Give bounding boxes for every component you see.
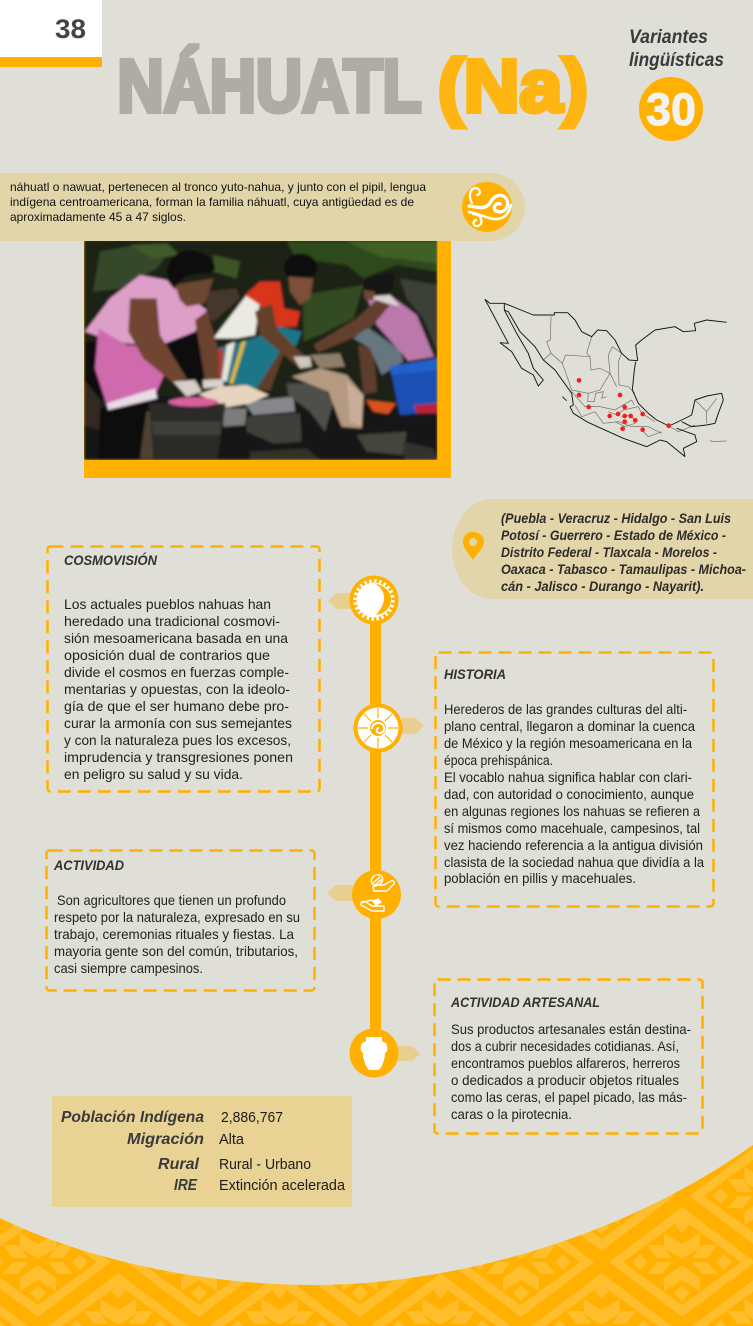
intro pill with text: aproximadamente 45 a 47 siglos. xyxy=(10,210,186,224)
footer textile pattern band xyxy=(0,1145,753,1326)
panel: historia: población en pillis y macehuales. xyxy=(444,870,636,886)
intro pill with text: indígena centroamericana, forman la familia náhuatl, cuya antigüedad es de xyxy=(10,195,414,209)
timeline spine xyxy=(370,600,381,1053)
panel: historia: HISTORIA xyxy=(444,666,506,682)
panel: historia: vez haciendo referencia a la antigua división xyxy=(444,837,703,853)
panel: actividad artesanal: encontramos pueblos alfareros, herreros xyxy=(451,1055,680,1071)
bucket xyxy=(149,403,226,459)
panel: historia xyxy=(436,652,714,906)
title: NÁHUATL xyxy=(118,44,422,128)
icon: clay jar xyxy=(350,1028,398,1078)
intro pill with text: náhuatl o nawuat, pertenecen al tronco yuto-nahua, y junto con el pipil, lengua xyxy=(10,180,426,194)
panel: cosmovisión: mentarias y opuestas, con la ideolo- xyxy=(64,681,290,697)
panel: actividad artesanal: como las ceras, el papel picado, las más- xyxy=(451,1089,687,1105)
panel: population stats: Rural - Urbano xyxy=(219,1156,311,1173)
states pill: Distrito Federal - Tlaxcala - Morelos - xyxy=(501,544,717,560)
state borders xyxy=(543,317,727,442)
photo with yellow frame xyxy=(84,239,451,478)
panel: cosmovisión: y con la naturaleza pues los excesos, xyxy=(64,732,291,748)
panel: cosmovisión: COSMOVISIÓN xyxy=(64,551,158,568)
panel: cosmovisión: curar la armonía con sus semejantes xyxy=(64,715,292,731)
panel: cosmovisión xyxy=(48,546,320,792)
variantes lingüísticas counter: lingüísticas xyxy=(629,50,724,71)
panel: cosmovisión: gía de que el ser humano debe pro- xyxy=(64,698,289,714)
panel: historia: El vocablo nahua significa hablar con clari- xyxy=(444,769,692,785)
panel: cosmovisión: Los actuales pueblos nahuas han xyxy=(64,596,271,612)
dough xyxy=(198,385,269,407)
timeline xyxy=(327,576,424,1078)
panel: actividad artesanal: ACTIVIDAD ARTESANAL xyxy=(450,994,600,1010)
panel: historia: sí mismos como macehuale, campesinos, tal xyxy=(444,820,700,836)
icon: location pin xyxy=(463,532,484,560)
panel: population stats: Migración xyxy=(127,1131,204,1148)
panel: historia: época prehispánica. xyxy=(444,752,553,768)
page number tab: 38 xyxy=(55,14,86,44)
panel: cosmovisión: heredado una tradicional cosmovi- xyxy=(64,613,280,629)
panel: actividad: Son agricultores que tienen un profundo xyxy=(57,892,286,908)
panel: actividad: trabajo, ceremonias rituales y fiestas. La xyxy=(54,926,294,942)
panel: population stats: IRE xyxy=(174,1177,198,1194)
panel: actividad artesanal: o dedicados a producir objetos rituales xyxy=(451,1072,679,1088)
woman 3 xyxy=(358,345,377,394)
panel: historia: de México y la región mesoamericana en la xyxy=(444,735,692,751)
panel: actividad xyxy=(46,850,314,990)
variantes lingüísticas counter: 30 xyxy=(646,84,696,135)
panel: actividad: ACTIVIDAD xyxy=(53,857,124,873)
panel: historia: clasista de la sociedad nahua que dividía a la xyxy=(444,854,704,870)
rocks xyxy=(84,395,437,460)
tab: artesanal xyxy=(397,1046,420,1061)
panel: population stats xyxy=(52,1096,352,1207)
states pill: cán - Jalisco - Durango - Nayarit). xyxy=(501,578,704,594)
icon: sun stone calendar xyxy=(354,704,402,752)
panel: actividad artesanal: Sus productos artesanales están destina- xyxy=(451,1021,691,1037)
woman 1 xyxy=(98,404,147,458)
blue bucket and bowl xyxy=(390,368,438,418)
speaker location dots xyxy=(577,378,671,432)
states pill: (Puebla - Veracruz - Hidalgo - San Luis xyxy=(501,510,731,526)
panel: actividad: respeto por la naturaleza, expresado en su xyxy=(54,909,300,925)
panel: cosmovisión: divide el cosmos en fuerzas comple- xyxy=(64,664,289,680)
map of Mexico with speaker locations xyxy=(485,299,727,457)
panel: population stats: Rural xyxy=(158,1156,200,1173)
panel: cosmovisión: imprudencia y transgresiones ponen xyxy=(64,749,293,765)
tab: historia xyxy=(402,718,424,734)
page number tab xyxy=(0,0,102,67)
panel: actividad artesanal: caras o la pirotecnia. xyxy=(451,1106,572,1122)
panel: historia: Herederos de las grandes culturas del alti- xyxy=(444,701,687,717)
intro pill with text xyxy=(0,173,525,241)
tab: actividad xyxy=(327,885,353,901)
panel: population stats: Población Indígena xyxy=(61,1109,204,1126)
panel: actividad artesanal: dos a cubrir necesidades cotidianas. Así, xyxy=(451,1038,679,1054)
variantes lingüísticas counter: Variantes xyxy=(629,27,708,48)
woman 2 xyxy=(257,350,285,391)
panel: cosmovisión: en peligro su salud y su vida. xyxy=(64,766,243,782)
panel: historia: dad, con autoridad o conocimiento, aunque xyxy=(444,786,694,802)
states pill: Potosí - Guerrero - Estado de México - xyxy=(501,527,726,543)
panel: actividad artesanal xyxy=(434,980,702,1134)
tab: cosmovisión xyxy=(328,593,352,609)
coastline and national border xyxy=(485,299,727,457)
icon: sun and moon xyxy=(350,576,398,624)
panel: population stats: 2,886,767 xyxy=(221,1109,283,1126)
panel: historia: plano central, llegaron a dominar la cuenca xyxy=(444,718,695,734)
panel: cosmovisión: sión mesoamericana basada en una xyxy=(64,630,288,646)
panel: actividad: mayoria gente son del común, tributarios, xyxy=(54,943,298,959)
icon: hands with seeds xyxy=(352,870,401,919)
panel: population stats: Alta xyxy=(219,1131,245,1148)
cloth on rocks xyxy=(292,368,363,428)
panel: population stats: Extinción acelerada xyxy=(219,1177,346,1194)
panel: cosmovisión: oposición dual de contrarios que xyxy=(64,647,270,663)
icon: wind swirl xyxy=(462,182,512,232)
panel: actividad: casi siempre campesinos. xyxy=(54,960,203,976)
states pill xyxy=(452,499,753,599)
panel: historia: en algunas regiones los nahuas se refieren a xyxy=(444,803,700,819)
title: (Na) xyxy=(438,44,588,128)
variantes lingüísticas counter xyxy=(629,27,724,141)
